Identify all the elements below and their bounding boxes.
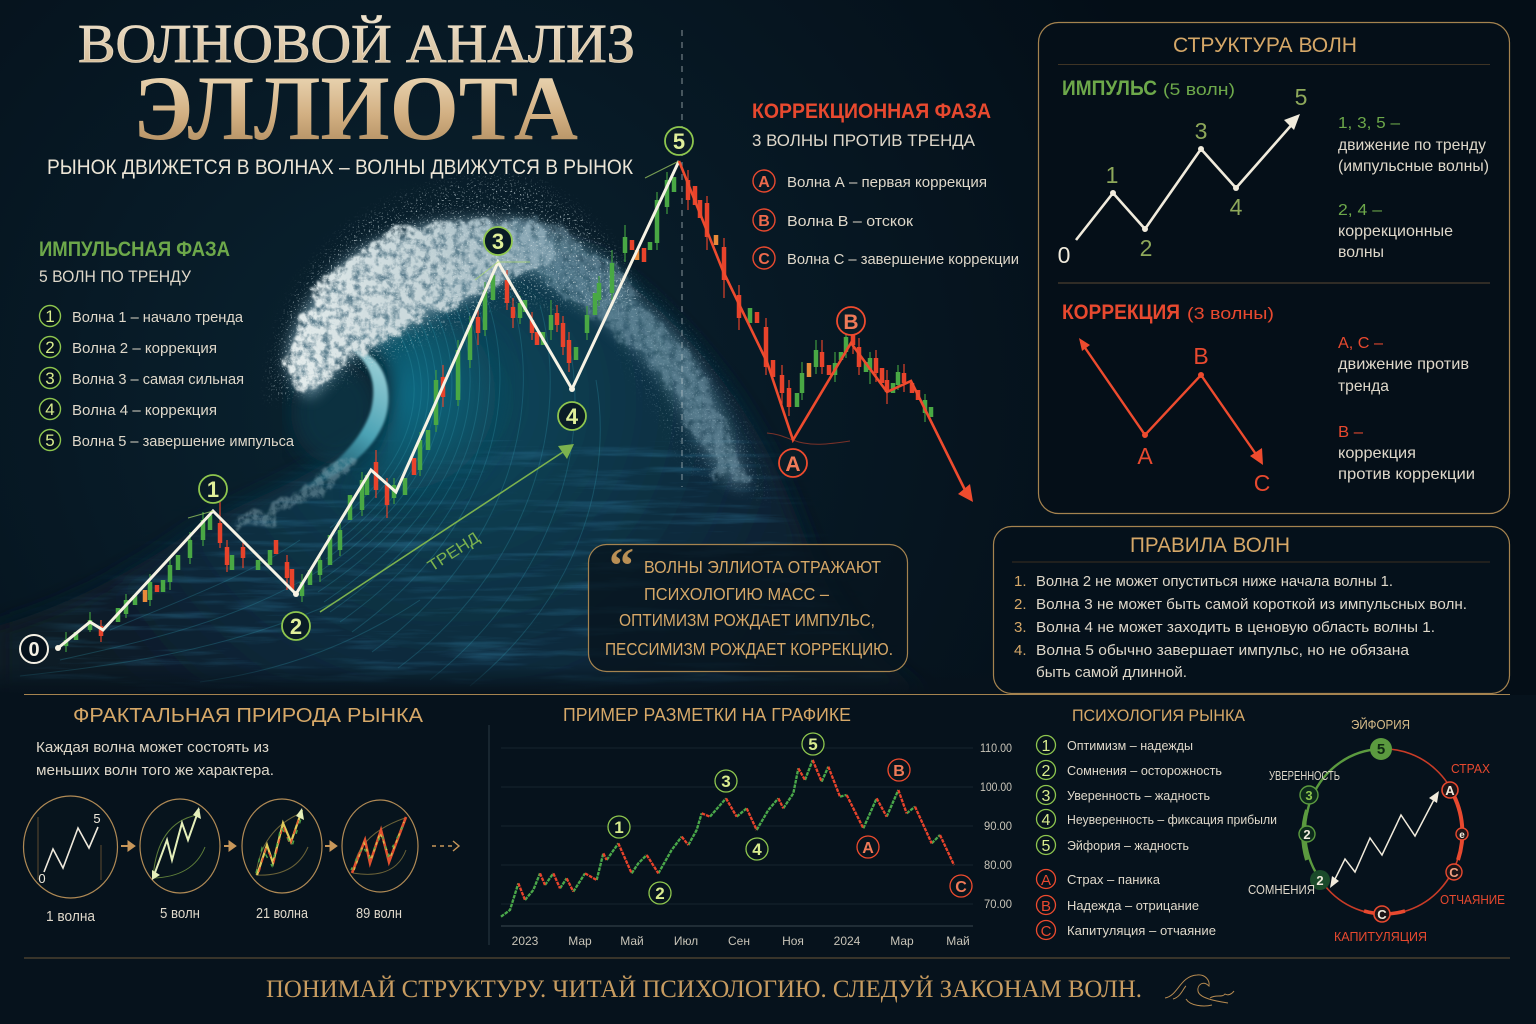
time axis: Июл <box>674 934 698 948</box>
correction heading: КОРРЕКЦИЯ <box>1062 301 1180 324</box>
wave marker labels: 4 <box>566 404 579 429</box>
correction diagram: C <box>1254 470 1270 496</box>
impulse diagram: 5 <box>1295 84 1307 110</box>
impulse notes: коррекционные <box>1338 223 1453 240</box>
fractal captions <box>46 906 402 925</box>
cycle labels: УВЕРЕННОСТЬ <box>1269 768 1340 783</box>
impulse notes: движение по тренду <box>1338 137 1486 154</box>
time axis: Мар <box>568 934 592 948</box>
psychology legend: Надежда – отрицание <box>1067 899 1199 913</box>
price axis: 100.00 <box>980 782 1012 794</box>
correction notes: коррекция <box>1338 445 1416 462</box>
footer slogan: ПОНИМАЙ СТРУКТУРУ. ЧИТАЙ ПСИХОЛОГИЮ. СЛЕДУЙ ЗАКОНАМ ВОЛН. <box>266 975 1142 1003</box>
cycle labels: СОМНЕНИЯ <box>1248 882 1315 897</box>
psychology legend: B <box>1041 898 1051 915</box>
psychology legend: 5 <box>1042 838 1051 855</box>
wave marker labels: 3 <box>492 229 504 254</box>
psychology legend: 4 <box>1042 812 1051 829</box>
fractal captions: 5 волн <box>160 906 200 922</box>
title: РЫНОК ДВИЖЕТСЯ В ВОЛНАХ – ВОЛНЫ ДВИЖУТСЯ В РЫНОК <box>47 156 634 179</box>
wave marker labels: 2 <box>290 614 302 639</box>
psychology legend: Капитуляция – отчаяние <box>1067 924 1216 938</box>
foam layers <box>233 217 748 532</box>
psychology legend: Уверенность – жадность <box>1067 789 1210 803</box>
chart markers: 4 <box>752 840 762 859</box>
chart markers: 2 <box>655 884 665 903</box>
panel: wave rules <box>994 526 1510 694</box>
panel: wave rules: Волна 3 не может быть самой короткой из импульсных волн. <box>1036 596 1467 613</box>
fractal circle: 1 wave: 0 <box>38 871 46 886</box>
panel: wave rules: ПРАВИЛА ВОЛН <box>1130 534 1290 557</box>
chart markers: 5 <box>808 735 818 754</box>
panel: impulse phase legend: 2 <box>45 338 55 357</box>
panel: correction phase legend: B <box>758 213 770 230</box>
chart markers: C <box>955 879 967 896</box>
time axis: 2024 <box>834 934 861 948</box>
icon: wave <box>1165 975 1234 1006</box>
impulse diagram: 3 <box>1195 118 1207 144</box>
time axis: 2023 <box>512 934 539 948</box>
panel: correction phase legend: Волна В – отскок <box>787 213 913 230</box>
impulse diagram: 2 <box>1140 235 1152 261</box>
impulse diagram: 4 <box>1230 194 1243 220</box>
impulse notes <box>1338 115 1489 261</box>
panel: impulse phase legend: Волна 3 – самая сильная <box>72 371 244 388</box>
psychology legend: 2 <box>1042 763 1051 780</box>
impulse notes: 2, 4 – <box>1338 202 1382 219</box>
wave marker labels: A <box>785 453 801 476</box>
candlestick chart on wave <box>66 170 931 652</box>
price line chart <box>501 760 954 917</box>
cycle labels <box>1248 717 1505 944</box>
price axis: 90.00 <box>984 821 1012 833</box>
wave lines: correction <box>679 161 973 502</box>
psychology legend: C <box>1041 923 1052 940</box>
panel: correction phase legend: Волна А – первая коррекция <box>787 174 987 191</box>
impulse notes: 1, 3, 5 – <box>1338 115 1400 132</box>
time axis <box>512 934 970 948</box>
trend arrow <box>320 444 574 612</box>
psychology legend: Эйфория – жадность <box>1067 839 1189 853</box>
wave marker labels: 0 <box>28 639 40 661</box>
panel: impulse phase legend: Волна 2 – коррекция <box>72 340 217 357</box>
psychology cycle <box>1248 717 1505 944</box>
trend arrow: ТРЕНД <box>425 529 483 575</box>
psychology legend: Оптимизм – надежды <box>1067 739 1193 753</box>
correction notes: тренда <box>1338 378 1389 395</box>
wave lines: impulse <box>55 161 679 651</box>
title <box>47 13 635 179</box>
price axis: 70.00 <box>984 899 1012 911</box>
cycle markers: e <box>1459 830 1465 841</box>
panel: wave rules: 1. <box>1014 573 1027 590</box>
panel: impulse phase legend: Волна 4 – коррекция <box>72 402 217 419</box>
wave illustration <box>10 170 814 694</box>
cycle labels: СТРАХ <box>1451 761 1490 776</box>
impulse notes: волны <box>1338 244 1384 261</box>
panel: wave structure <box>1038 22 1510 514</box>
panel: correction phase legend: 3 ВОЛНЫ ПРОТИВ ТРЕНДА <box>752 131 976 150</box>
time axis: Сен <box>728 934 750 948</box>
panel: wave rules: 4. <box>1014 642 1027 659</box>
chart markers <box>608 733 972 904</box>
fractal circle: 1 wave <box>24 796 118 898</box>
chart markers: B <box>893 763 905 780</box>
fractal circle: 5 waves <box>140 799 220 893</box>
panel: fractal nature: Каждая волна может состоять из <box>36 739 269 756</box>
panel: wave rules: Волна 2 не может опуститься ниже начала волны 1. <box>1036 573 1393 590</box>
chart markers: A <box>862 840 874 857</box>
chart markers: 3 <box>721 772 731 791</box>
panel: correction phase legend <box>752 100 1019 269</box>
panel: correction phase legend: Волна С – завершение коррекции <box>787 251 1019 268</box>
callout: quote: ПЕССИМИЗМ РОЖДАЕТ КОРРЕКЦИЮ. <box>605 639 893 659</box>
panel: correction phase legend: C <box>758 251 770 268</box>
impulse heading: ИМПУЛЬС <box>1062 77 1157 100</box>
panel: wave structure: СТРУКТУРА ВОЛН <box>1173 34 1357 57</box>
panel: impulse phase legend: 3 <box>45 369 55 388</box>
cycle markers: C <box>1377 907 1387 922</box>
cycle markers: A <box>1445 783 1455 798</box>
cycle markers: 2 <box>1303 827 1311 842</box>
correction notes <box>1338 335 1475 483</box>
panel: market psychology <box>1036 706 1505 944</box>
correction heading <box>1062 301 1274 324</box>
time axis: Ноя <box>782 934 804 948</box>
correction notes: В – <box>1338 424 1363 441</box>
impulse heading: (5 волн) <box>1163 80 1235 99</box>
fractal captions: 89 волн <box>356 906 402 922</box>
separator: top of wave 5 dashed line <box>681 30 683 487</box>
cycle labels: КАПИТУЛЯЦИЯ <box>1334 929 1427 944</box>
panel: chart example: ПРИМЕР РАЗМЕТКИ НА ГРАФИКЕ <box>563 705 851 725</box>
panel: impulse phase legend: Волна 1 – начало тренда <box>72 309 244 326</box>
correction diagram: A <box>1137 443 1153 469</box>
psychology legend: 3 <box>1042 788 1051 805</box>
panel: wave rules: 3. <box>1014 619 1027 636</box>
fractal captions: 1 волна <box>46 909 96 925</box>
price axis: 110.00 <box>980 743 1012 755</box>
wave marker labels: B <box>843 311 859 334</box>
psychology legend: 1 <box>1042 738 1051 755</box>
correction diagram <box>1079 338 1270 496</box>
panel: impulse phase legend: ИМПУЛЬСНАЯ ФАЗА <box>39 238 230 261</box>
cycle labels: ЭЙФОРИЯ <box>1351 717 1410 732</box>
cycle markers: C <box>1449 865 1459 880</box>
psychology legend: A <box>1041 872 1051 889</box>
callout: quote: ОПТИМИЗМ РОЖДАЕТ ИМПУЛЬС, <box>619 610 875 630</box>
cycle labels: ОТЧАЯНИЕ <box>1440 892 1505 907</box>
cycle markers: 5 <box>1377 741 1385 758</box>
panel: impulse phase legend: 4 <box>45 400 55 419</box>
psychology legend: Страх – паника <box>1067 873 1160 887</box>
impulse heading <box>1062 77 1235 100</box>
time axis: Май <box>620 934 644 948</box>
fractal circle: 89 waves <box>342 800 418 892</box>
price axis <box>980 743 1012 911</box>
callout: quote: ВОЛНЫ ЭЛЛИОТА ОТРАЖАЮТ <box>644 557 881 577</box>
callout: quote: ПСИХОЛОГИЮ МАСС – <box>644 584 829 604</box>
psychology legend: Сомнения – осторожность <box>1067 764 1222 778</box>
callout: quote: “ <box>609 537 634 593</box>
wave marker labels: 5 <box>673 129 685 154</box>
panel: chart example <box>501 705 1012 948</box>
panel: wave rules: быть самой длинной. <box>1036 664 1187 681</box>
correction notes: движение против <box>1338 356 1469 373</box>
fractal arrows <box>121 841 459 851</box>
wave marker labels <box>20 127 865 663</box>
time axis: Май <box>946 934 970 948</box>
bottom strip background <box>0 695 1536 1024</box>
psychology legend <box>1036 736 1277 940</box>
chart markers: 1 <box>614 818 624 837</box>
panel: market psychology: ПСИХОЛОГИЯ РЫНКА <box>1072 706 1246 725</box>
impulse diagram: 1 <box>1106 162 1118 188</box>
panel: impulse phase legend <box>39 238 295 450</box>
panel: wave rules: Волна 4 не может заходить в ценовую область волны 1. <box>1036 619 1435 636</box>
title: ЭЛЛИОТА <box>133 57 578 159</box>
psychology legend: Неуверенность – фиксация прибыли <box>1067 813 1277 827</box>
panel: fractal nature: ФРАКТАЛЬНАЯ ПРИРОДА РЫНКА <box>73 705 424 727</box>
panel: correction phase legend: КОРРЕКЦИОННАЯ ФАЗА <box>752 100 991 123</box>
panel: impulse phase legend: 1 <box>45 307 55 326</box>
cycle markers <box>1299 738 1468 922</box>
impulse diagram: 0 <box>1058 242 1070 268</box>
panel: fractal nature: меньших волн того же характера. <box>36 762 274 779</box>
panel: impulse phase legend: 5 ВОЛН ПО ТРЕНДУ <box>39 267 191 286</box>
price axis: 80.00 <box>984 860 1012 872</box>
impulse notes: (импульсные волны) <box>1338 158 1489 175</box>
panel: fractal nature <box>24 705 459 925</box>
correction notes: А, С – <box>1338 335 1383 352</box>
callout: quote <box>588 537 908 672</box>
panel: wave rules: Волна 5 обычно завершает импульс, но не обязана <box>1036 642 1410 659</box>
correction notes: против коррекции <box>1338 466 1475 483</box>
correction heading: (3 волны) <box>1187 304 1274 323</box>
correction diagram: B <box>1193 343 1209 369</box>
wave marker labels: 1 <box>207 477 219 502</box>
cycle markers: 3 <box>1305 788 1313 803</box>
time axis: Мар <box>890 934 914 948</box>
impulse diagram <box>1058 84 1307 268</box>
panel: impulse phase legend: 5 <box>45 431 55 450</box>
title: ВОЛНОВОЙ АНАЛИЗ <box>78 13 635 74</box>
fractal circle: 21 waves <box>242 799 322 893</box>
panel: correction phase legend: A <box>758 174 770 191</box>
cycle markers: 2 <box>1316 873 1324 888</box>
fractal circle: 1 wave: 5 <box>93 811 101 826</box>
panel: wave rules: 2. <box>1014 596 1027 613</box>
panel: impulse phase legend: Волна 5 – завершение импульса <box>72 433 295 450</box>
fractal captions: 21 волна <box>256 906 309 922</box>
